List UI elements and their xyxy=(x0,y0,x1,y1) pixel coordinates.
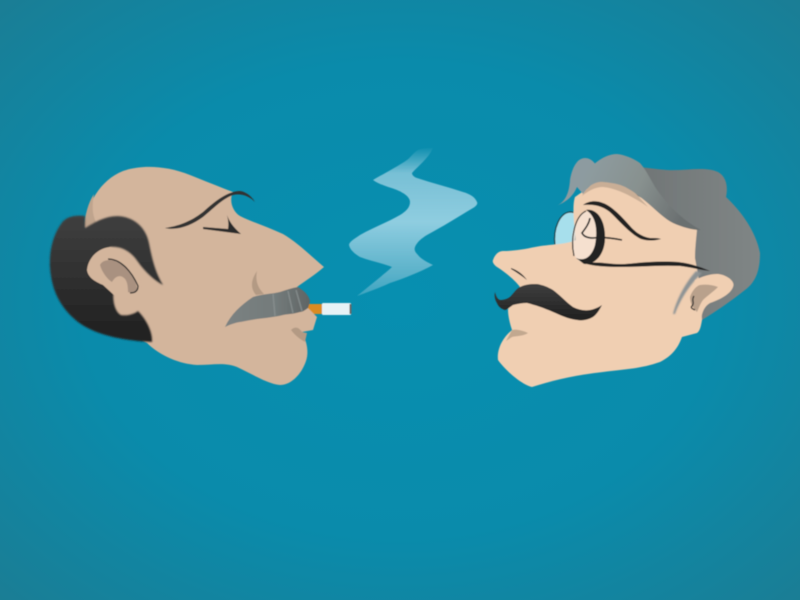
right eye xyxy=(582,218,622,240)
cigarette filter xyxy=(306,304,323,314)
ear lobe xyxy=(690,274,734,320)
left closed eye xyxy=(203,215,241,234)
far lens xyxy=(555,212,578,247)
left man: smoker xyxy=(50,167,351,385)
temple arm xyxy=(583,261,710,271)
cigarette ash xyxy=(350,304,352,314)
frame front rim xyxy=(576,210,605,264)
smoke xyxy=(349,148,477,296)
right hair back xyxy=(590,166,760,320)
right lip shadow xyxy=(506,330,528,341)
lens xyxy=(569,209,605,265)
right head skin xyxy=(493,182,702,387)
left ear xyxy=(87,247,142,300)
left nose shadow xyxy=(252,271,264,295)
right ear xyxy=(690,274,734,320)
left mustache xyxy=(225,287,310,327)
cigarette xyxy=(306,303,352,315)
right far lock of hair xyxy=(556,158,600,206)
frame xyxy=(573,211,586,256)
glasses xyxy=(569,201,710,271)
cigarette paper xyxy=(322,303,351,315)
ear curl xyxy=(691,296,695,310)
right nostril xyxy=(511,268,527,280)
right front lock of hair xyxy=(583,154,701,230)
ear inner xyxy=(690,285,718,312)
right curled mustache xyxy=(495,284,602,320)
left hair xyxy=(50,216,163,342)
left eyebrow xyxy=(165,191,255,229)
left head skin xyxy=(85,167,324,385)
right man: glasses and curled mustache xyxy=(493,154,760,387)
right hairline shadow xyxy=(582,179,648,207)
left bald edge shadow xyxy=(84,194,96,228)
left lower lip shadow xyxy=(291,328,307,342)
right eyebrow xyxy=(583,201,661,240)
right ear hair strand xyxy=(673,271,702,314)
left mustache highlights xyxy=(273,290,302,316)
